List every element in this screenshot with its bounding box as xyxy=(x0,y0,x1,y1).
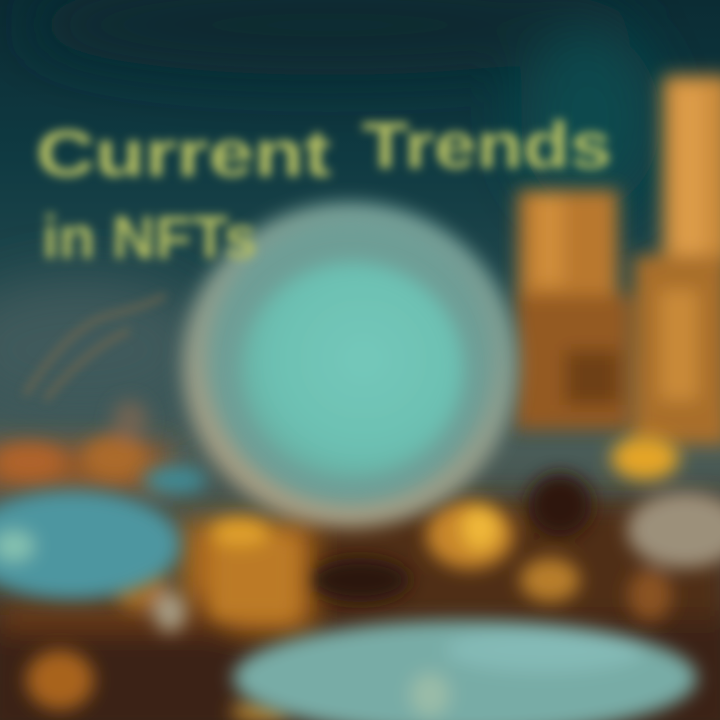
title line three: in NFTs xyxy=(42,204,257,271)
bottom teal coin xyxy=(233,620,697,720)
outer ring xyxy=(182,202,518,528)
title line one: Current xyxy=(36,116,331,190)
faint chart line xyxy=(25,295,165,400)
background glow xyxy=(0,0,660,420)
bottom coin pile xyxy=(0,445,720,720)
left teal coin xyxy=(0,466,207,599)
lens face xyxy=(240,262,464,478)
central coin xyxy=(182,202,518,528)
gold coin columns xyxy=(515,75,720,445)
title xyxy=(36,108,612,271)
title line two: Trends xyxy=(362,108,612,182)
inner ring xyxy=(208,220,492,504)
